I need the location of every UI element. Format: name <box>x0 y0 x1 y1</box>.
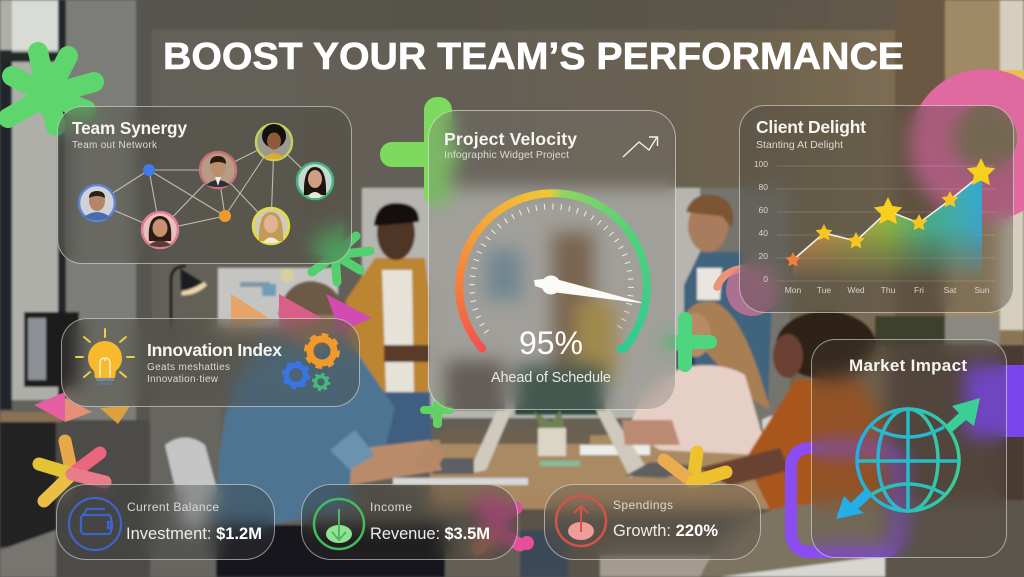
icon: light bulb <box>76 329 134 385</box>
table <box>430 430 780 510</box>
small pink arc <box>717 268 745 287</box>
purple square <box>791 448 899 552</box>
icon: globe <box>857 409 959 511</box>
description: Innovation·tiew <box>147 374 219 385</box>
area chart: Wed <box>848 285 865 295</box>
title: BOOST YOUR TEAM’S PERFORMANCE <box>163 36 904 78</box>
white chair <box>762 415 786 450</box>
panel: Project Velocity <box>428 110 676 410</box>
subtitle: Team out Network <box>72 140 158 151</box>
plant pot <box>538 428 566 456</box>
person: standing man, denim jacket <box>684 252 772 410</box>
icon: gears <box>283 335 338 390</box>
small green asterisk <box>312 226 370 282</box>
heading: Project Velocity: Project Velocity <box>444 129 578 149</box>
panel: Market Impact <box>811 339 1007 558</box>
person: standing man, yellow shirt <box>346 258 430 425</box>
area chart: 0 <box>764 274 769 284</box>
floor lamp <box>171 266 186 345</box>
whiteboard <box>362 188 702 418</box>
icon: wallet <box>69 498 121 550</box>
area chart: 20 <box>759 251 769 261</box>
icon: spending arrow <box>556 496 606 546</box>
panel: Team Synergy <box>57 106 352 264</box>
large pink ring top right <box>985 70 1024 120</box>
avatar 3 <box>200 152 236 188</box>
plants and right wall <box>875 316 945 346</box>
area chart: 40 <box>759 228 769 238</box>
flower bottom-left <box>39 441 105 501</box>
stat card: Current Balance <box>56 484 275 560</box>
person: woman, cream blouse <box>682 301 770 410</box>
green asterisk <box>8 52 94 126</box>
gauge caps <box>478 345 625 353</box>
description: Geats meshatties <box>147 362 230 373</box>
value: 95%: 95% <box>519 325 583 361</box>
area chart: Fri <box>914 285 924 295</box>
label: Ahead of Schedule: Ahead of Schedule <box>491 370 611 386</box>
avatar 6 <box>253 208 289 244</box>
description <box>147 362 230 385</box>
network nodes <box>143 164 231 222</box>
avatar 2 <box>142 212 178 248</box>
area chart: Mon <box>785 285 802 295</box>
icon: income arrow <box>314 499 364 549</box>
triangles <box>231 294 272 328</box>
green plus <box>380 97 460 207</box>
person: seated man, blue shirt <box>215 335 395 525</box>
avatar 4 <box>256 124 292 160</box>
blurred colleague behind gauge <box>486 250 522 300</box>
yellow flower <box>664 452 726 482</box>
area chart: Tue <box>817 285 832 295</box>
area chart: Sat <box>944 285 957 295</box>
gauge ticks <box>470 204 634 333</box>
stat card: Spendings <box>544 484 761 560</box>
person: woman, orange shirt <box>776 311 876 379</box>
subtitle: Stanting At Delight <box>756 139 843 151</box>
icon: trend arrow <box>623 137 658 157</box>
area chart: 60 <box>759 205 769 215</box>
left desk and floor <box>0 420 150 577</box>
small green plus <box>420 400 454 428</box>
heading: Team Synergy: Team Synergy <box>72 118 188 138</box>
area chart: 80 <box>759 182 769 192</box>
area chart <box>754 158 996 295</box>
area chart: Sun <box>975 285 990 295</box>
needle <box>534 276 648 304</box>
icon: arrows <box>836 398 980 519</box>
value: Investment: $1.2M <box>126 525 262 543</box>
heading: Innovation Index: Innovation Index <box>147 340 283 360</box>
label: Income <box>370 500 413 514</box>
value: Revenue: $3.5M <box>370 525 490 543</box>
subtitle: Infographic Widget Project <box>444 149 569 161</box>
panel: Client Delight <box>739 105 1014 313</box>
value: Growth: 220% <box>613 522 719 540</box>
area chart: Thu <box>881 285 896 295</box>
label: Spendings <box>613 498 673 512</box>
label: Current Balance <box>127 500 220 514</box>
avatar 1 <box>79 185 115 221</box>
stat card: Income <box>301 484 518 560</box>
panel: Innovation Index <box>61 318 360 407</box>
heading: Client Delight: Client Delight <box>756 117 867 137</box>
pink flower <box>478 500 520 548</box>
window <box>0 0 66 400</box>
avatar 5 <box>297 163 333 199</box>
green plus right <box>660 312 717 372</box>
heading: Market Impact: Market Impact <box>849 356 968 375</box>
gauge arc <box>455 189 651 352</box>
laptops <box>596 410 648 478</box>
area chart: 100 <box>754 159 769 169</box>
network links <box>97 142 315 230</box>
